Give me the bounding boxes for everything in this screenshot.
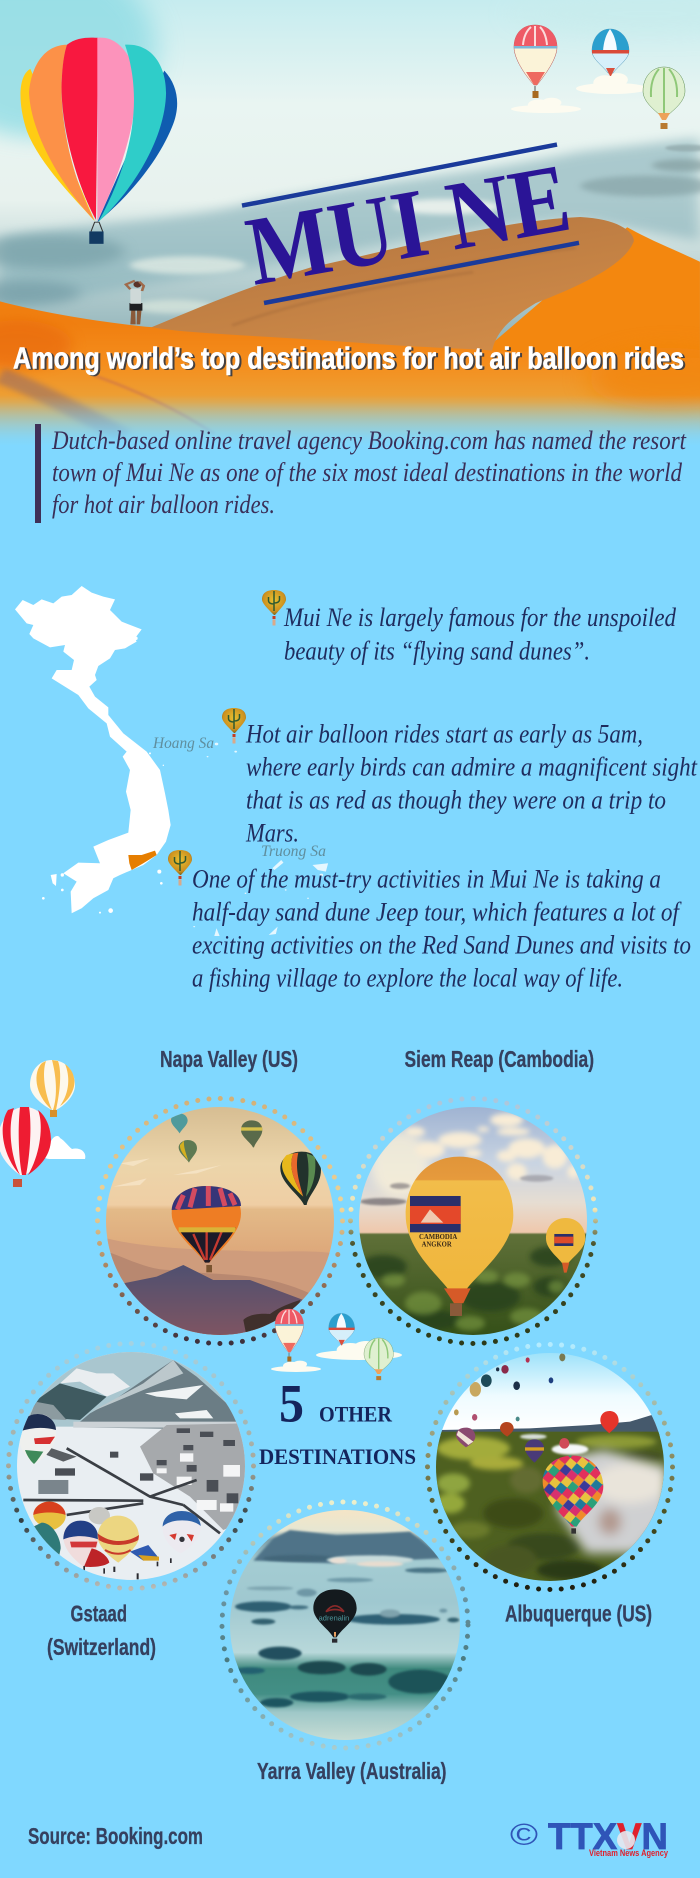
dotted rings (8, 1098, 672, 1748)
text: sand dunes (283, 603, 677, 665)
watercolor balloons center (271, 1309, 402, 1380)
text: jeep tour: a fishing village to explore the local way of life. (192, 963, 623, 992)
photo: Gstaad (10, 1347, 250, 1587)
orange right dune (492, 227, 700, 425)
clouds and sun glow (370, 1130, 430, 1197)
center cloud left (271, 1361, 321, 1372)
logo: TTXVN: Vietnam News Agency (589, 1848, 668, 1858)
black balloon: adrenalin (319, 1614, 349, 1623)
small Cambodia balloon (546, 1218, 585, 1273)
label: Albuquerque: Albuquerque (US) (505, 1601, 652, 1627)
center blue balloon (329, 1313, 355, 1345)
label: Yarra Valley: Yarra Valley (Australia) (257, 1758, 446, 1784)
mountains (30, 1383, 107, 1420)
large Cambodia balloon: CAMBODIA (419, 1232, 458, 1241)
blue balloon (592, 29, 629, 76)
front orange dune (0, 301, 700, 455)
cloud under blue balloon (576, 73, 648, 94)
title: MUI NE with rules: MUI NE (239, 144, 578, 307)
text: balloon rides: Hot air balloon rides start as early as 5am, (245, 720, 643, 749)
heading: 5 other destinations: OTHER (319, 1402, 393, 1427)
icon: balloon bullet 1 (262, 590, 286, 626)
dark foreground mountain (123, 1265, 303, 1337)
icon: balloon bullet 2 (222, 708, 246, 744)
large Cambodia balloon (406, 1157, 513, 1316)
text: sand dunes: beauty of its “flying sand dunes”. (284, 636, 590, 665)
roads (23, 1448, 220, 1533)
center green balloon (364, 1338, 393, 1380)
label: Gstaad: Gstaad (70, 1601, 127, 1627)
photo: Siem Reap (357, 1103, 590, 1340)
text: balloon rides: Mars. (245, 818, 299, 847)
island labels: Hoang Sa (152, 735, 214, 752)
logo: TTXVN: TTXVN (548, 1816, 668, 1857)
labels: Napa Valley and Siem Reap: Siem Reap (Cambodia) (404, 1046, 594, 1072)
forest (360, 1247, 570, 1330)
intro block (35, 424, 687, 523)
large striped balloon (172, 1186, 241, 1272)
center red balloon (275, 1309, 304, 1362)
coastal islands (42, 637, 164, 914)
brown sunlit dune (152, 217, 634, 358)
text: balloon rides (245, 720, 698, 847)
Mui Ne province highlight (128, 851, 157, 870)
decoration: striped balloons and cloud at left (0, 1060, 85, 1187)
labels: Napa Valley and Siem Reap (160, 1046, 594, 1072)
island labels (152, 735, 326, 860)
village (140, 1423, 247, 1530)
hero fade to blue (0, 395, 700, 447)
heading: 5 other destinations (259, 1374, 416, 1469)
black balloon (313, 1589, 357, 1643)
intro block: for hot air balloon rides. (52, 490, 275, 519)
watercolor balloons top right (511, 25, 685, 129)
labels: Napa Valley and Siem Reap: Napa Valley (US) (160, 1046, 298, 1072)
photo: Yarra Valley (227, 1507, 467, 1747)
photo: Albuquerque (436, 1353, 664, 1581)
hero photo: sky and sand dunes (0, 0, 700, 455)
upper balloons (241, 1120, 262, 1147)
green balloon (643, 67, 685, 129)
balloons on snow (20, 1414, 52, 1454)
person photographing on dune (126, 281, 144, 324)
paracel and spratly islands (193, 743, 328, 936)
island labels: Truong Sa (261, 843, 326, 860)
center cloud right (316, 1341, 402, 1360)
smoke (557, 1450, 667, 1553)
sky balloons (600, 1411, 619, 1433)
icon: balloon bullet 3 (168, 850, 192, 886)
map of Vietnam (15, 586, 171, 914)
photo: Napa Valley (103, 1103, 337, 1340)
large Cambodia balloon: ANGKOR (422, 1239, 452, 1248)
heading: 5 other destinations: DESTINATIONS (259, 1444, 416, 1469)
forest light and shade (435, 1435, 663, 1580)
source: Source: Booking.com (28, 1823, 203, 1849)
multicolored balloon (543, 1456, 603, 1534)
cloud under red balloon (511, 98, 581, 113)
label: Gstaad: (Switzerland) (47, 1634, 156, 1660)
logo: TTXVN: © (510, 1817, 538, 1852)
heading: 5 other destinations: 5 (279, 1374, 304, 1434)
label: Gstaad (47, 1601, 156, 1660)
text: jeep tour (192, 865, 691, 992)
right balloon (280, 1152, 321, 1205)
big rainbow hot air balloon (20, 38, 177, 244)
red balloon (514, 25, 557, 98)
